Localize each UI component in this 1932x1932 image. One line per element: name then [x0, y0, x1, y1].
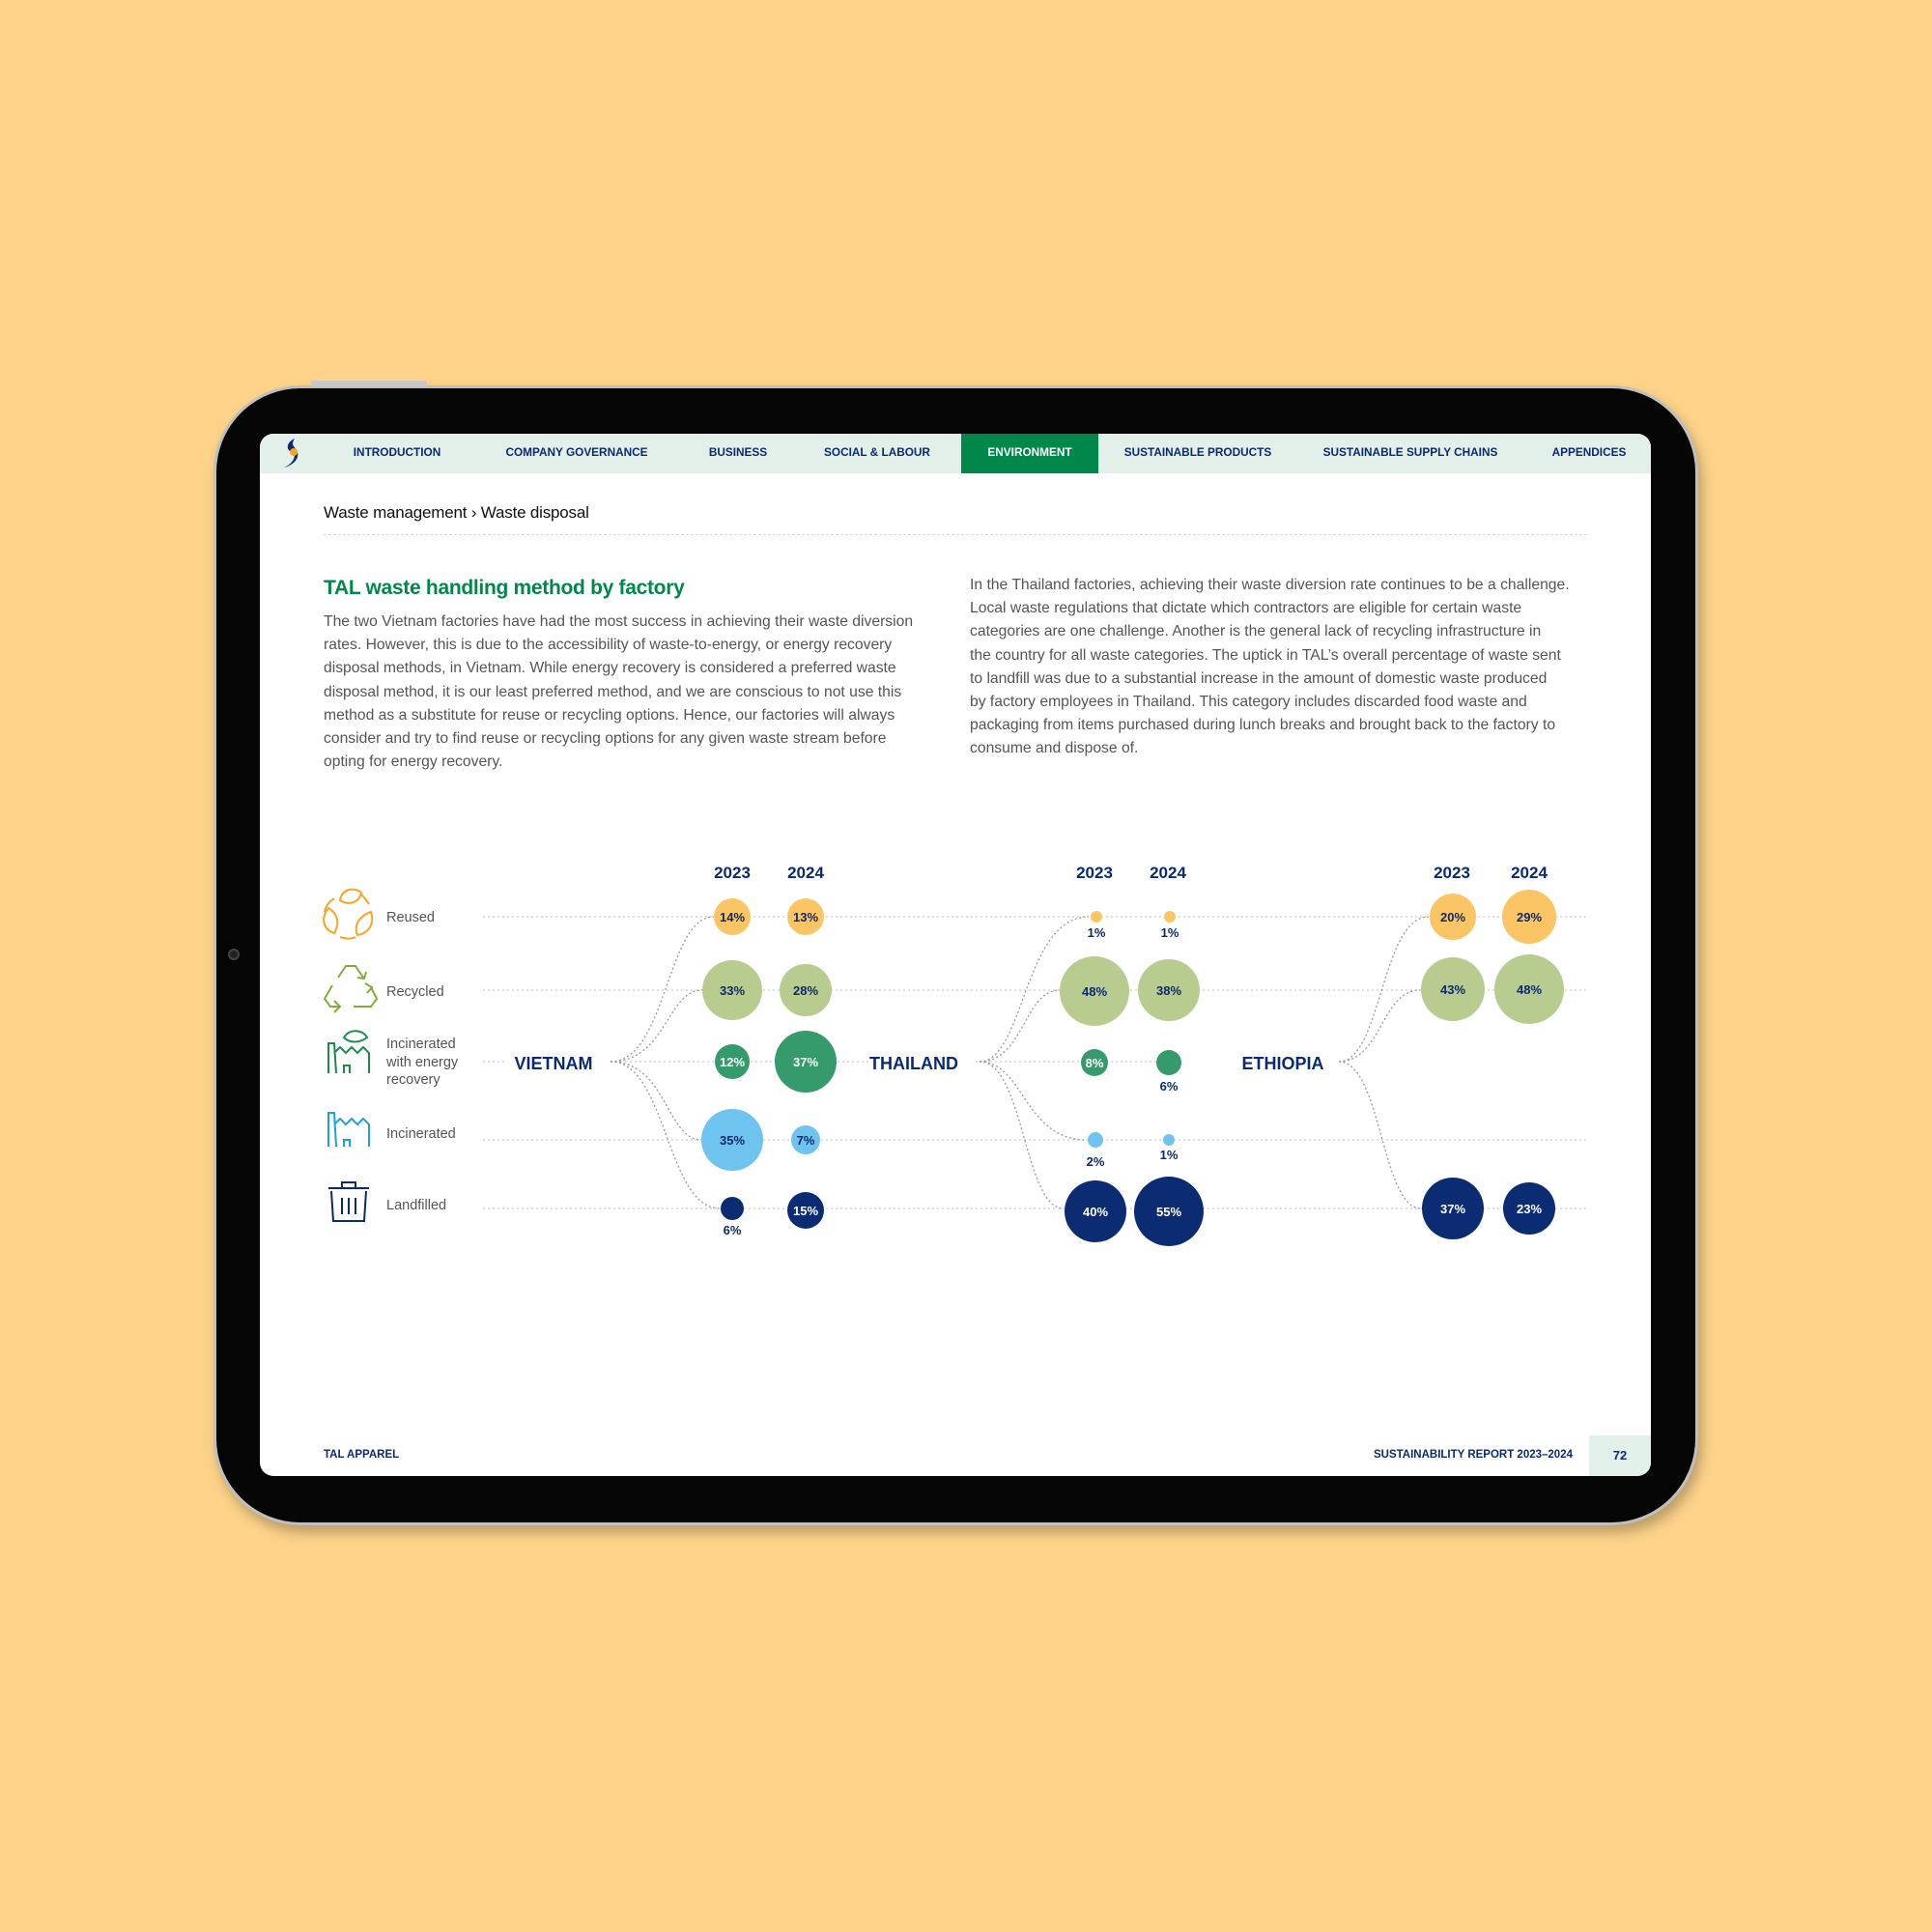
bubbles: 12%	[720, 1055, 745, 1069]
country labels: THAILAND	[869, 1054, 958, 1073]
connector curves	[611, 917, 1429, 1208]
country labels: VIETNAM	[514, 1054, 593, 1073]
text: APPENDICES	[1552, 445, 1626, 459]
tablet buttons	[311, 381, 427, 386]
bubbles: 37%	[793, 1055, 818, 1069]
category labels: Incinerated	[386, 1126, 456, 1142]
bubbles: 1%	[1088, 925, 1106, 940]
bubbles: 15%	[793, 1204, 818, 1218]
bubbles: 7%	[797, 1133, 815, 1148]
page number	[1589, 1435, 1651, 1476]
year headers: 2024	[1511, 864, 1548, 882]
left paragraph: The two Vietnam factories have had the most success in achieving their waste diversion	[324, 613, 913, 630]
nav items: INTRODUCTION	[354, 445, 440, 459]
nav bar	[260, 434, 1651, 473]
year headers: 2023	[1434, 864, 1470, 882]
active tab: environment	[961, 434, 1098, 473]
text: SUSTAINABLE PRODUCTS	[1124, 445, 1271, 459]
bubbles: 38%	[1156, 983, 1181, 998]
bubbles: 48%	[1517, 982, 1542, 997]
icon: landfilled	[328, 1182, 369, 1221]
right paragraph: the country for all waste categories. The uptick in TAL’s overall percentage of waste sent	[970, 647, 1561, 664]
bubbles: 2%	[1087, 1154, 1105, 1169]
bubbles: 6%	[1160, 1079, 1179, 1094]
tablet body	[213, 385, 1698, 1525]
bubbles: 29%	[1517, 910, 1542, 924]
icon: incinerated with energy	[328, 1031, 369, 1073]
right paragraph: consume and dispose of.	[970, 740, 1138, 756]
bubbles: 33%	[720, 983, 745, 998]
left paragraph	[324, 613, 913, 770]
icon: reused	[324, 890, 372, 939]
right paragraph	[970, 577, 1570, 756]
left paragraph: consider and try to find reuse or recycling options for any given waste stream before	[324, 730, 886, 747]
bubbles: 23%	[1517, 1202, 1542, 1216]
icon: recycled	[325, 966, 377, 1012]
bubbles: 48%	[1082, 984, 1107, 999]
category labels: Reused	[386, 910, 435, 925]
text: ENVIRONMENT	[987, 445, 1072, 459]
breadcrumb: Waste management › Waste disposal	[324, 503, 589, 522]
bubbles: 8%	[1086, 1056, 1104, 1070]
bubbles: 37%	[1440, 1202, 1465, 1216]
right paragraph: by factory employees in Thailand. This category includes discarded food waste and	[970, 694, 1527, 710]
year headers: 2023	[714, 864, 751, 882]
right paragraph: Local waste regulations that dictate which contractors are eligible for certain waste	[970, 600, 1521, 616]
camera	[228, 949, 240, 960]
footer right: SUSTAINABILITY REPORT 2023–2024	[1374, 1449, 1573, 1461]
country labels: ETHIOPIA	[1241, 1054, 1324, 1073]
year headers: 2024	[1150, 864, 1186, 882]
left paragraph: disposal methods, in Vietnam. While energy recovery is considered a preferred waste	[324, 660, 896, 676]
bubbles: 6%	[724, 1223, 742, 1237]
bubbles: 1%	[1160, 1148, 1179, 1162]
page number: 72	[1613, 1448, 1627, 1463]
bubbles: 35%	[720, 1133, 745, 1148]
bubbles: 14%	[720, 910, 745, 924]
right paragraph: to landfill was due to a substantial increase in the amount of domestic waste produced	[970, 670, 1547, 687]
category labels	[385, 910, 459, 1213]
bubbles: 13%	[793, 910, 818, 924]
category labels: recovery	[386, 1072, 440, 1088]
footer left: TAL APPAREL	[324, 1449, 399, 1461]
category labels: Landfilled	[386, 1198, 446, 1213]
right paragraph: packaging from items purchased during lunch breaks and brought back to the factory to	[970, 717, 1555, 733]
right paragraph: categories are one challenge. Another is the general lack of recycling infrastructure in	[970, 623, 1541, 639]
right paragraph: In the Thailand factories, achieving their waste diversion rate continues to be a challenge.	[970, 577, 1570, 593]
bubbles: 20%	[1440, 910, 1465, 924]
left paragraph: opting for energy recovery.	[324, 753, 502, 770]
bubbles	[701, 890, 1564, 1246]
category labels: with energy	[385, 1055, 459, 1070]
left paragraph: method as a substitute for reuse or recycling options. Hence, our factories will always	[324, 707, 895, 724]
year headers	[714, 864, 1548, 882]
icon: incinerated	[328, 1113, 369, 1147]
category labels: Incinerated	[386, 1037, 456, 1052]
text: SOCIAL & LABOUR	[824, 445, 930, 459]
text: BUSINESS	[709, 445, 767, 459]
text: SUSTAINABLE SUPPLY CHAINS	[1323, 445, 1497, 459]
left paragraph: rates. However, this is due to the accessibility of waste-to-energy, or energy recovery	[324, 637, 892, 653]
screen	[260, 434, 1651, 1476]
bubbles: 40%	[1083, 1205, 1108, 1219]
bubbles: 28%	[793, 983, 818, 998]
logo	[284, 439, 298, 468]
year headers: 2023	[1076, 864, 1113, 882]
bubbles: 55%	[1156, 1205, 1181, 1219]
year headers: 2024	[787, 864, 824, 882]
text: COMPANY GOVERNANCE	[505, 445, 648, 459]
country labels	[514, 1054, 1324, 1073]
category labels: Recycled	[386, 984, 444, 1000]
title: TAL waste handling method by factory	[324, 577, 684, 599]
bubbles: 1%	[1161, 925, 1179, 940]
left paragraph: disposal method, it is our least preferred method, and we are conscious to not use this	[324, 684, 901, 700]
bubbles: 43%	[1440, 982, 1465, 997]
